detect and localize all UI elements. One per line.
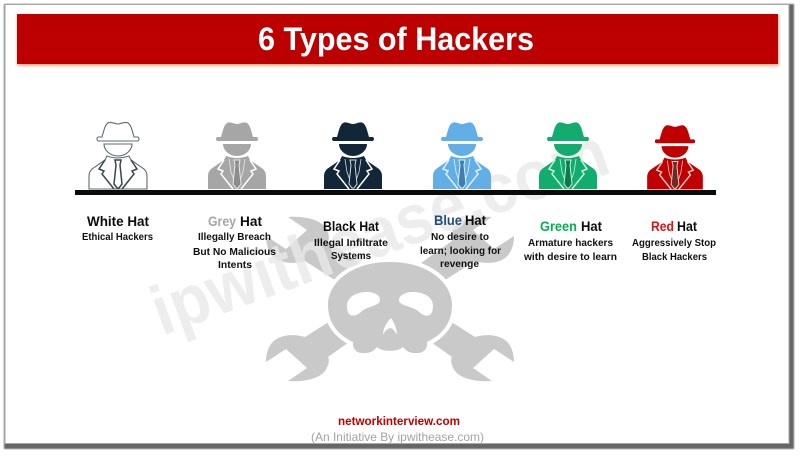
skull and crossed wrenches illustration bbox=[266, 217, 514, 381]
label: grey hat bbox=[193, 214, 276, 271]
label: blue hat: revenge bbox=[440, 258, 479, 270]
label: green hat: with desire to learn bbox=[523, 251, 617, 263]
label: blue hat: Hat bbox=[465, 213, 486, 228]
label: black hat bbox=[314, 219, 388, 262]
icon: white hat hacker bbox=[89, 122, 147, 189]
icon: grey hat hacker bbox=[208, 122, 266, 189]
footer: networkinterview.com bbox=[338, 414, 460, 428]
icon: red hat hacker bbox=[647, 125, 703, 189]
icon: green hat hacker bbox=[539, 122, 597, 189]
label: grey hat: Illegally Breach bbox=[198, 231, 271, 243]
label: black hat: Illegal Infiltrate bbox=[314, 237, 388, 249]
watermark: ipwithease.com bbox=[140, 113, 618, 350]
label: red hat: Black Hackers bbox=[642, 251, 707, 263]
label: red hat: Hat bbox=[677, 219, 697, 234]
label: blue hat: No desire to bbox=[431, 231, 489, 243]
label: green hat: Green bbox=[540, 219, 577, 234]
label: grey hat: Hat bbox=[240, 214, 262, 229]
title: 6 Types of Hackers bbox=[258, 21, 534, 57]
label: white hat: Ethical Hackers bbox=[82, 231, 153, 243]
label: green hat: Armature hackers bbox=[528, 237, 613, 249]
label: white hat bbox=[82, 214, 153, 243]
label: grey hat: Intents bbox=[218, 259, 252, 271]
label: white hat: White Hat bbox=[87, 214, 149, 229]
icon: black hat hacker bbox=[324, 122, 382, 189]
label: green hat: Hat bbox=[581, 219, 602, 234]
timeline line bbox=[75, 190, 716, 195]
label: grey hat: But No Malicious bbox=[193, 246, 276, 258]
label: blue hat: Blue bbox=[434, 213, 462, 228]
footer: (An Initiative By ipwithease.com) bbox=[311, 430, 484, 444]
label: blue hat: learn; looking for bbox=[420, 245, 501, 257]
label: red hat bbox=[632, 219, 716, 263]
label: red hat: Aggressively Stop bbox=[632, 237, 716, 249]
label: black hat: Black Hat bbox=[323, 219, 379, 234]
label: grey hat: Grey bbox=[208, 214, 236, 229]
icon: blue hat hacker bbox=[433, 122, 491, 189]
label: green hat bbox=[523, 219, 617, 263]
label: black hat: Systems bbox=[331, 250, 371, 262]
footer bbox=[311, 414, 484, 444]
title banner bbox=[17, 14, 779, 66]
label: blue hat bbox=[420, 213, 501, 270]
label: red hat: Red bbox=[651, 219, 674, 234]
